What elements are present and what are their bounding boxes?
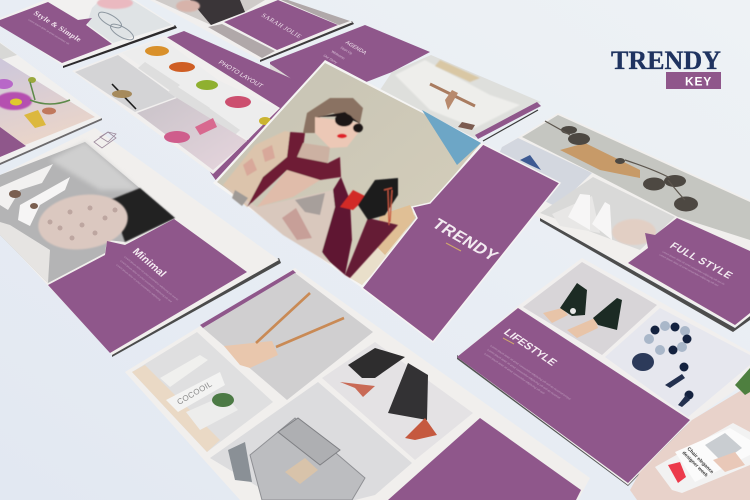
- jewelry photo: [605, 308, 750, 417]
- sneakers photo: [523, 262, 657, 355]
- slide: Minimal: [0, 128, 281, 357]
- slide: Full Style: [490, 113, 750, 332]
- slide: Minimal: Minimal: [130, 246, 169, 279]
- logo badge: KEY: [685, 74, 712, 88]
- handbag photo: [210, 382, 412, 500]
- slide: Sarah Jolie: SARAH JOLIE: [260, 12, 303, 40]
- cover purple panel: [362, 144, 560, 342]
- slide: Full Style: Lorem ipsum dolor sit amet consectetur adipiscing elit sed: [658, 253, 720, 287]
- slide: Agenda: [270, 25, 541, 141]
- slide: Agenda: Our Story: [322, 54, 338, 65]
- cover title: TRENDY: [428, 216, 502, 265]
- slide: Minimal: Lorem ipsum dolor sit amet consectetur adipiscing elit sed: [119, 259, 173, 303]
- slide: Agenda: Welcome: [330, 50, 346, 60]
- slide: Full Style: Lorem ipsum dolor sit amet consectetur adipiscing elit sed do: [661, 250, 726, 286]
- slide: Style & Simple: Lorem ipsum dolor sit amet consectetur elit: [27, 19, 70, 46]
- slide: Lifestyle: LIFESTYLE: [501, 327, 559, 368]
- heels photo: [322, 342, 473, 460]
- phone: Chair elegance: [686, 446, 715, 475]
- hand and brushes photo: [203, 273, 373, 400]
- slide: Photo Layout: [72, 31, 322, 182]
- cosmetics photo: [132, 332, 273, 452]
- slide: Lifestyle: Lorem ipsum dolor sit amet consectetur adipiscing elit sed do eiusmod: [486, 348, 562, 400]
- slide: Lifestyle: Lorem ipsum dolor sit amet consectetur adipiscing elit sed do eiusmod tempor: [489, 344, 572, 401]
- slide: Style & Simple: [0, 0, 177, 68]
- slide: Agenda: Start Up: [339, 46, 353, 55]
- logo wordmark: TRENDY: [611, 46, 721, 75]
- woman: [223, 98, 398, 278]
- slide: Sarah Jolie: [150, 0, 354, 62]
- slide: bottom collage: [125, 268, 590, 500]
- slide: Agenda: AGENDA: [344, 40, 368, 56]
- cosmetics photo: COCOOIL: [176, 379, 214, 407]
- slide: Lifestyle: [457, 258, 750, 486]
- slide: Full Style: FULL STYLE: [667, 241, 735, 281]
- slide: flower photo: [0, 42, 102, 165]
- slide: Photo Layout: PHOTO LAYOUT: [217, 59, 264, 90]
- phone: [655, 423, 750, 493]
- slide: Style & Simple: Style & Simple: [32, 9, 84, 44]
- slide: cover photo: [213, 60, 560, 342]
- slide: peach corner with phone: [630, 368, 750, 500]
- slide: Minimal: Lorem ipsum dolor sit amet consectetur adipiscing: [115, 263, 163, 302]
- logo: [611, 46, 721, 89]
- slide: Minimal: Lorem ipsum dolor sit amet consectetur adipiscing elit sed do: [123, 255, 180, 302]
- phone: designer week: [681, 450, 709, 479]
- slide: Lifestyle: Lorem ipsum dolor sit amet consectetur adipiscing elit sed: [483, 352, 546, 395]
